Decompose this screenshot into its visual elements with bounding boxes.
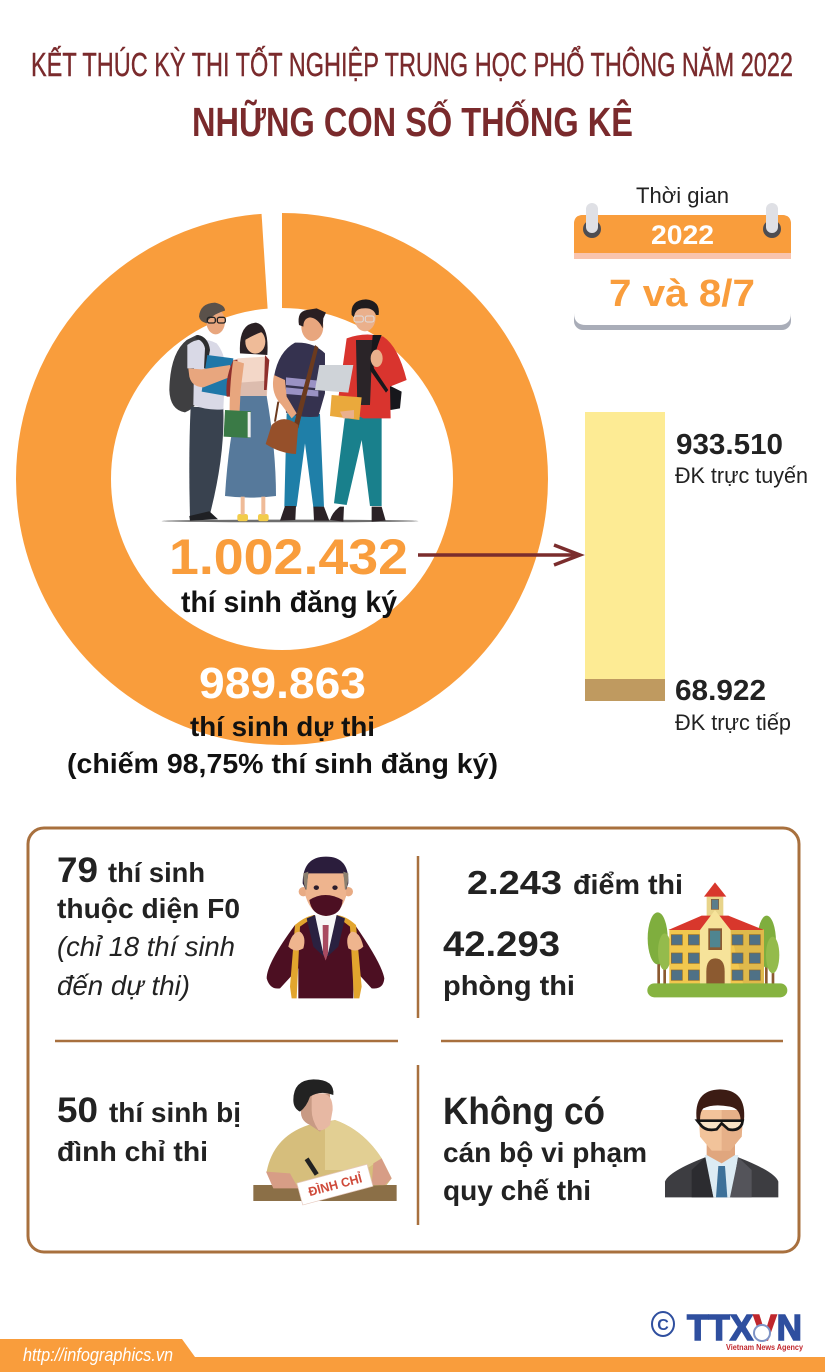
no violating staff text: quy chế thi: [443, 1175, 591, 1206]
registered label: thí sinh đăng ký: [181, 586, 397, 619]
no violating staff text: cán bộ vi phạm: [443, 1137, 647, 1168]
online registrations: ĐK trực tuyến: [675, 463, 808, 488]
icon: calendar: 7 và 8/7: [609, 273, 755, 315]
candidates attended: thí sinh dự thi: [190, 711, 375, 742]
donut chart: [64, 205, 500, 698]
candidates attended: 989.863: [199, 659, 366, 708]
suspended candidates text: thí sinh bị: [109, 1097, 241, 1128]
exam sites and rooms text: điểm thi: [573, 869, 683, 900]
suspended candidates text: đình chỉ thi: [57, 1136, 208, 1167]
icon: suspended student: ĐÌNH CHỈ: [307, 1170, 364, 1199]
exam sites and rooms text: phòng thi: [443, 970, 575, 1001]
student 1: [169, 303, 233, 521]
suspended candidates text: 50: [57, 1091, 98, 1130]
logo: TTXVN: TTXVN: [687, 1307, 802, 1348]
title: [31, 45, 793, 145]
logo: TTXVN: Vietnam News Agency: [726, 1343, 803, 1352]
online registrations: 933.510: [676, 429, 783, 461]
icon: masked student: [267, 857, 384, 998]
stacked bar: [585, 412, 665, 701]
student 4: [315, 299, 407, 522]
candidates attended: [67, 659, 498, 779]
exam sites and rooms text: 2.243: [467, 864, 562, 901]
icon: suspended student: [253, 1079, 397, 1205]
footer bar: [0, 1339, 825, 1372]
F0 candidates text: thuộc diện F0: [57, 893, 240, 924]
icon: school building: [647, 882, 787, 997]
student 3: [266, 308, 329, 521]
time label: Thời gian: [636, 183, 729, 208]
arrow: [418, 545, 580, 565]
logo: TTXVN: C: [657, 1317, 669, 1334]
panel: statistics: [28, 828, 799, 1252]
icon: calendar: 2022: [651, 220, 714, 250]
in-person registrations: [675, 675, 791, 735]
in-person registrations: ĐK trực tiếp: [675, 710, 791, 735]
logo: TTXVN: [652, 1307, 803, 1352]
exam sites and rooms text: 42.293: [443, 925, 560, 964]
F0 candidates text: (chỉ 18 thí sinh: [57, 931, 235, 962]
title: NHỮNG CON SỐ THỐNG KÊ: [192, 99, 633, 145]
online registrations: [675, 429, 808, 488]
F0 candidates text: 79: [57, 851, 98, 890]
icon: calendar: [574, 203, 791, 330]
website url: http://infographics.vn: [23, 1345, 173, 1365]
candidates attended: (chiếm 98,75% thí sinh đăng ký): [67, 748, 498, 779]
F0 candidates text: [57, 851, 240, 1001]
student 2: [224, 323, 276, 521]
F0 candidates text: đến dự thi): [57, 970, 190, 1001]
F0 candidates text: thí sinh: [108, 857, 205, 888]
icon: official: [665, 1089, 778, 1197]
suspended candidates text: [57, 1091, 241, 1167]
icon: group of students: [162, 299, 418, 522]
exam sites and rooms text: [443, 864, 683, 1001]
no violating staff text: Không có: [443, 1091, 605, 1133]
in-person registrations: 68.922: [675, 675, 766, 707]
total registered number: 1.002.432: [169, 529, 408, 585]
no violating staff text: [443, 1091, 647, 1206]
